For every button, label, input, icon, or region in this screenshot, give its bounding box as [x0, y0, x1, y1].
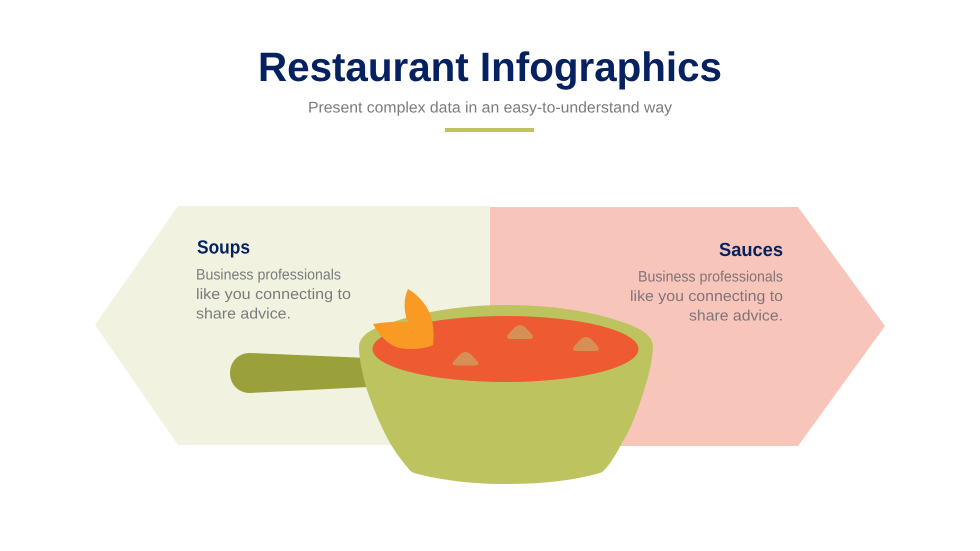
text block: soups description: [196, 266, 351, 322]
title: Restaurant Infographics: [258, 44, 722, 90]
subtitle: Present complex data in an easy-to-understand way: [308, 100, 672, 116]
text block: sauces description: Business professionals: [638, 268, 783, 286]
soup pieces: [453, 325, 599, 366]
soup surface: [372, 316, 638, 382]
bowl body: [359, 305, 653, 484]
heading: sauces: Sauces: [719, 240, 783, 261]
text block: soups description: Business professionals: [196, 266, 341, 283]
panel: soups: [95, 206, 490, 445]
heading: soups: Soups: [197, 238, 250, 258]
text block: sauces description: like you connecting to: [630, 288, 783, 305]
title underline: [445, 128, 534, 132]
panel: sauces: [490, 207, 885, 446]
text block: soups description: like you connecting to: [196, 286, 351, 303]
bowl handle: [230, 353, 368, 393]
icon: soup bowl: [230, 289, 653, 484]
garnish leaves: [373, 289, 434, 349]
text block: soups description: share advice.: [196, 305, 291, 322]
text block: sauces description: share advice.: [689, 307, 783, 324]
text block: sauces description: [630, 268, 783, 324]
